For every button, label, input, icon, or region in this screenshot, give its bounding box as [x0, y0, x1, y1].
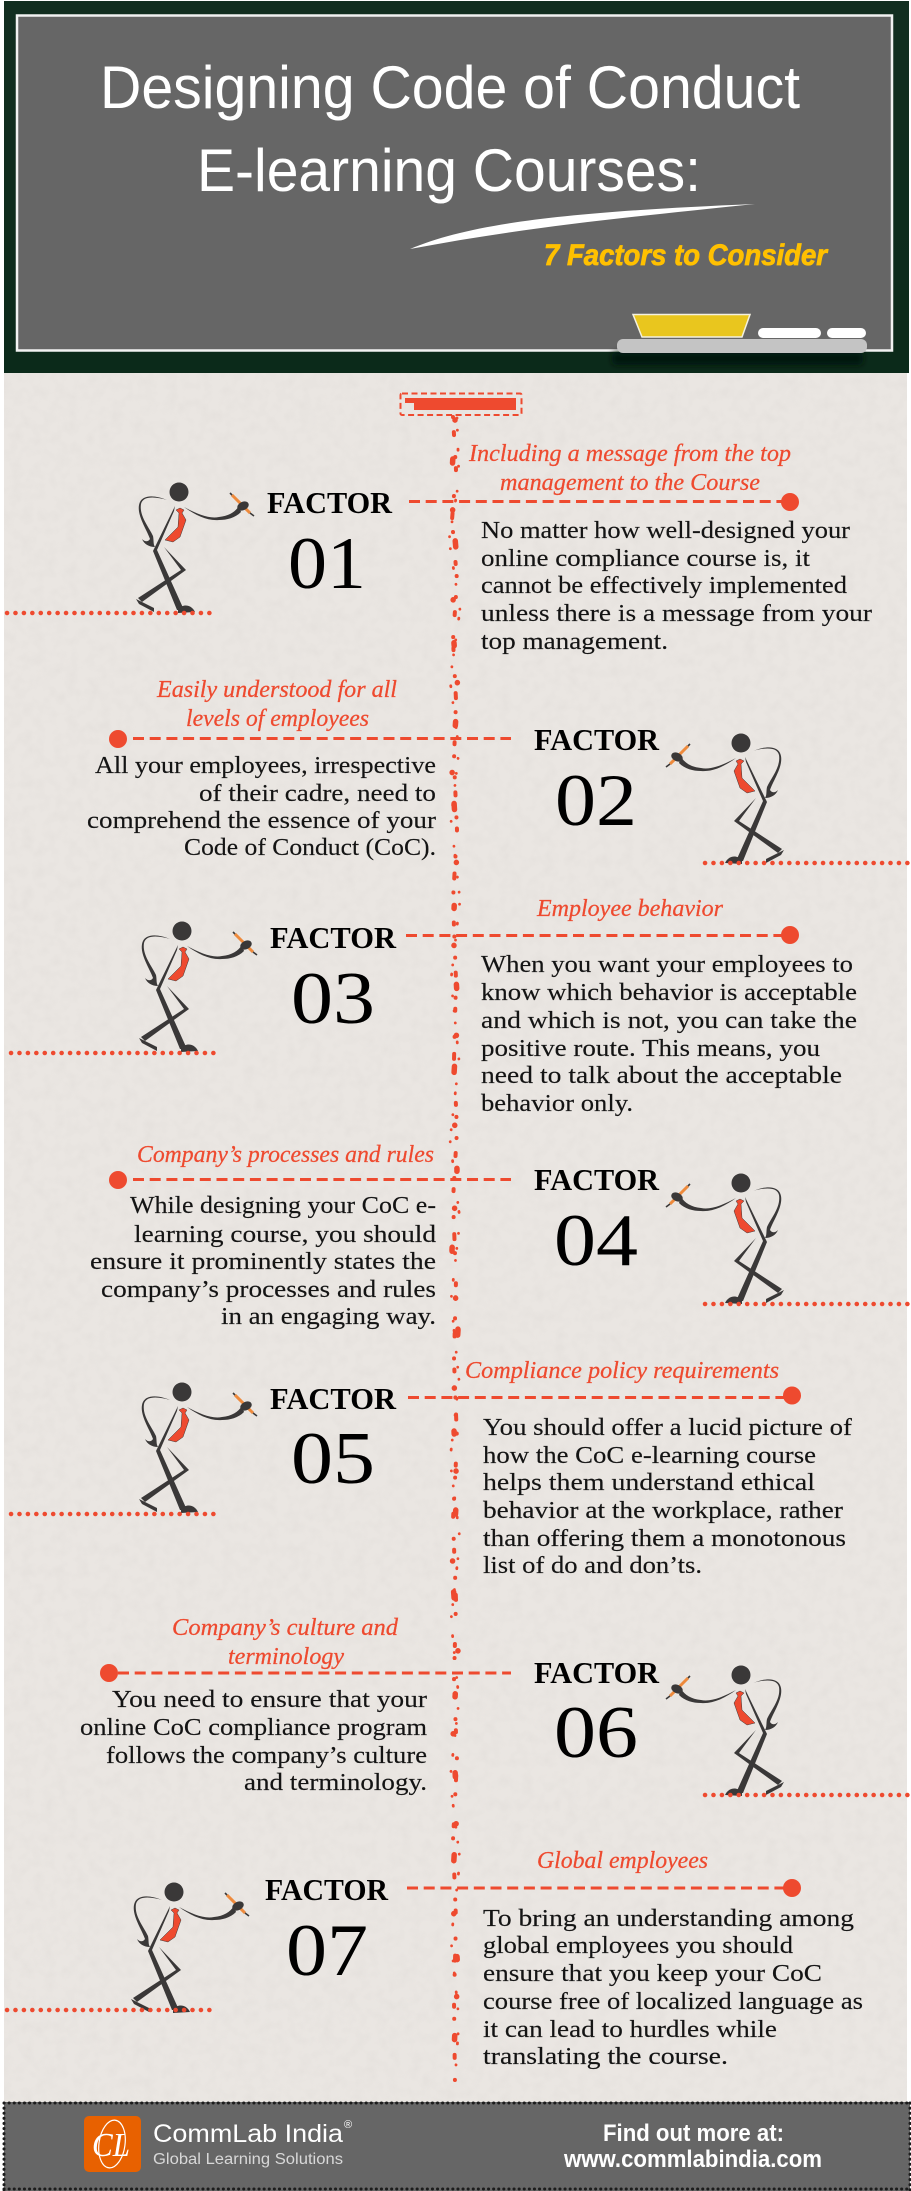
body text 1: No matter how well-designed your [481, 517, 850, 544]
title: Designing Code of Conduct [100, 54, 800, 121]
panel: factor 01 [7, 441, 872, 655]
connector 5 [408, 1386, 801, 1404]
body text 2: of their cadre, need to [199, 780, 436, 807]
logo: CommLab India [84, 2116, 141, 2172]
factor label 2: FACTOR [534, 722, 660, 757]
panel: factor 04 [90, 1142, 908, 1330]
icon: stick man with pencil 7 [131, 1882, 249, 2013]
heading 3: Employee behavior [536, 896, 724, 922]
brand name [153, 2119, 352, 2168]
icon: red marker at top of timeline [400, 394, 522, 415]
chalk swoosh [410, 204, 755, 249]
body text 7: it can lead to hurdles while [483, 2016, 777, 2043]
connector 1 [409, 493, 799, 511]
body text 5: than offering them a monotonous [483, 1525, 846, 1552]
heading 2 [156, 677, 397, 732]
icon: stick man with pencil 3 [139, 922, 257, 1052]
number 04: 04 [554, 1200, 638, 1282]
body text 1: online compliance course is, it [481, 545, 810, 572]
body text 5: how the CoC e-learning course [483, 1442, 816, 1469]
icon: stick man with pencil 1 [136, 482, 254, 613]
brand name: Global Learning Solutions [153, 2151, 343, 2168]
heading 6: Company’s culture and [172, 1615, 399, 1641]
body text 1: unless there is a message from your [481, 600, 872, 627]
body text 5: list of do and don’ts. [483, 1552, 702, 1579]
factor label 3: FACTOR [270, 920, 397, 955]
body text 2: Code of Conduct (CoC). [184, 834, 436, 861]
body text 3: need to talk about the acceptable [481, 1062, 842, 1089]
body text 5: You should offer a lucid picture of [483, 1414, 853, 1441]
dotted ground 6 [705, 1793, 908, 1797]
body text 5: behavior at the workplace, rather [483, 1497, 843, 1524]
body text 2: comprehend the essence of your [87, 807, 436, 834]
body text 3: positive route. This means, you [481, 1035, 820, 1062]
paper background [4, 372, 907, 2102]
connector 7 [407, 1879, 801, 1897]
heading 1: Including a message from the top [468, 441, 791, 467]
factor label 5: FACTOR [270, 1381, 397, 1416]
body text 7 [483, 1905, 863, 2070]
dotted ground 3 [11, 1051, 219, 1055]
dotted ground 5 [11, 1512, 219, 1516]
factor label 6: FACTOR [534, 1655, 660, 1690]
body text 5 [483, 1414, 853, 1579]
chalkboard header [4, 1, 909, 373]
dotted ground 2 [705, 861, 908, 865]
connector 2 [109, 730, 511, 748]
body text 3: and which is not, you can take the [481, 1007, 857, 1034]
body text 3 [481, 951, 857, 1117]
heading 4: Company’s processes and rules [137, 1142, 434, 1168]
body text 4: company’s processes and rules [101, 1276, 436, 1303]
dotted ground 1 [7, 611, 210, 615]
call to action: Find out more at: [603, 2120, 784, 2147]
number 01: 01 [288, 523, 366, 605]
body text 6: online CoC compliance program [80, 1714, 427, 1741]
number 03: 03 [291, 958, 375, 1040]
title: E-learning Courses: [197, 137, 701, 204]
body text 3: behavior only. [481, 1090, 633, 1117]
body text 1 [481, 517, 872, 655]
title [100, 54, 800, 204]
brand name: ® [344, 2119, 352, 2131]
heading 6: terminology [228, 1644, 344, 1670]
call to action [563, 2120, 822, 2173]
factor label 7: FACTOR [265, 1872, 389, 1907]
body text 6: follows the company’s culture [106, 1742, 427, 1769]
connector 6 [100, 1664, 511, 1682]
logo: CommLab India: CL [92, 2127, 130, 2164]
heading 7: Global employees [537, 1848, 708, 1874]
body text 5: helps them understand ethical [483, 1469, 815, 1496]
body text 4: ensure it prominently states the [90, 1248, 436, 1275]
body text 7: course free of localized language as [483, 1988, 863, 2015]
footer bar [4, 2102, 910, 2191]
body text 4: in an engaging way. [221, 1303, 436, 1330]
dotted ground 7 [7, 2008, 215, 2012]
factor label 4: FACTOR [534, 1162, 660, 1197]
brand name: CommLab India [153, 2120, 343, 2148]
body text 7: To bring an understanding among [483, 1905, 854, 1932]
body text 6 [80, 1686, 427, 1796]
body text 4 [90, 1192, 436, 1330]
body text 6: and terminology. [244, 1769, 427, 1796]
body text 2: All your employees, irrespective [95, 752, 436, 779]
heading 5: Compliance policy requirements [465, 1358, 779, 1384]
heading 2: levels of employees [186, 706, 369, 732]
dotted ground 4 [705, 1302, 908, 1306]
icon: stick man with pencil 2 [666, 734, 784, 864]
number 02: 02 [555, 760, 637, 842]
panel: factor 05 [11, 1358, 853, 1579]
body text 6: You need to ensure that your [112, 1686, 427, 1713]
number 07: 07 [286, 1910, 368, 1992]
panel: factor 02 [87, 677, 908, 864]
body text 4: While designing your CoC e- [130, 1192, 436, 1219]
chalk tray with eraser and chalks [612, 314, 867, 365]
body text 7: translating the course. [483, 2043, 728, 2070]
body text 3: When you want your employees to [481, 951, 853, 978]
icon: stick man with pencil 4 [666, 1174, 784, 1304]
connector 3 [406, 926, 799, 944]
panel: factor 03 [11, 896, 857, 1117]
number 05: 05 [291, 1418, 375, 1500]
timeline of scattered dots [449, 417, 460, 2088]
subtitle: 7 Factors to Consider [544, 239, 829, 272]
number 06: 06 [554, 1692, 638, 1774]
connector 4 [109, 1171, 511, 1189]
body text 3: know which behavior is acceptable [481, 979, 857, 1006]
body text 1: cannot be effectively implemented [481, 572, 847, 599]
panel: factor 06 [80, 1615, 908, 1796]
body text 2 [87, 752, 436, 861]
icon: stick man with pencil 5 [139, 1382, 257, 1513]
body text 7: global employees you should [483, 1932, 793, 1959]
panel: factor 07 [7, 1848, 863, 2070]
body text 7: ensure that you keep your CoC [483, 1960, 822, 1987]
factor label 1: FACTOR [267, 485, 393, 520]
body text 4: learning course, you should [134, 1221, 436, 1248]
call to action: www.commlabindia.com [563, 2146, 822, 2173]
heading 2: Easily understood for all [156, 677, 397, 703]
body text 1: top management. [481, 628, 668, 655]
heading 1 [468, 441, 791, 496]
heading 1: management to the Course [500, 470, 760, 496]
icon: stick man with pencil 6 [666, 1666, 784, 1796]
heading 6 [172, 1615, 399, 1670]
